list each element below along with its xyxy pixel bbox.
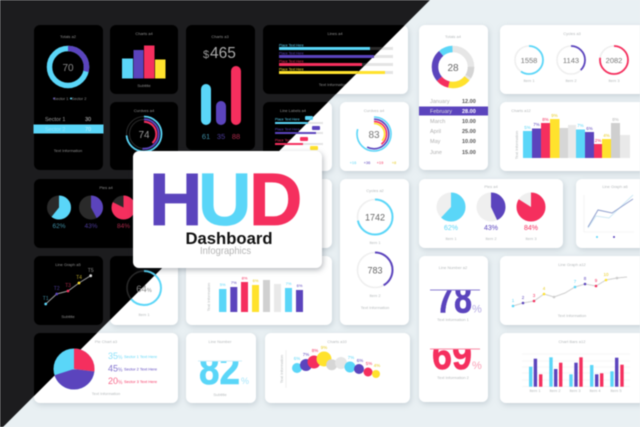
panel: pies dark: 43% [84,223,98,230]
panel: curves dark: 74 [138,130,150,141]
panel: line graph dark: T1 [43,296,49,302]
panel: bubble chart [265,333,410,403]
panel: bubble chart: 7% [348,355,354,360]
panel: pies dark: Pies a4 [99,185,113,190]
panel: curves light: Curdves a4 [364,108,385,113]
panel: lines light [263,25,408,94]
panel: totals donut and table: March [430,119,445,125]
panel: line labels dark: Line Labels a4 [280,108,307,113]
panel: charts a12 grouped bars: 6% [586,126,593,131]
panel: curves light: +16 [350,160,357,165]
panel: totals donut and table: May [430,139,441,145]
panel: cycles: Item 1 [523,78,535,83]
panel: lines dark: Text Information [319,82,347,87]
panel: chart bars a12: Item 5 [610,388,622,393]
panel: line graph dark [34,256,103,325]
dark background [0,0,430,427]
panel: line number 82: Subtitle [213,392,227,397]
panel: bubble chart: Text Information [279,355,284,383]
panel: line labels dark [262,102,328,152]
panel: totals donut and table: 15.00 [462,150,476,156]
panel: pie chart light: Sector 3 Text Here [124,379,158,384]
panel: line labels light [263,102,332,171]
panel: charts a12 grouped bars: 9% [551,113,558,118]
panel: cycles: 2082 [606,56,622,65]
panel: line graph a12: 4 [543,286,546,291]
panel: rounded bars dark: Charts a3 [211,34,229,39]
panel: line graph dark: T2 [54,286,60,292]
panel: cycles vertical [340,179,409,325]
panel: charts a12 grouped bars: 7% [577,123,584,128]
panel: line numbers 78 and 69: 78 [436,275,472,322]
panel: curves light: +19 [377,160,384,165]
dark dashboard layer [0,0,430,427]
panel: lines dark: Lines a4 [327,31,343,36]
panel: line number 82 [186,333,256,403]
panel: pie chart light [34,333,178,403]
panel: chart bars a12 [500,333,640,403]
panel: line number 82: % [241,376,249,386]
panel: line graph dark: Subtitle [61,314,75,319]
panel: charts a12 grouped bars: 7% [533,122,540,127]
panel: bubble chart: 6% [294,356,300,361]
panel: totals donut and table: 28 [447,63,459,74]
panel: line graph a12: 2 [522,295,525,300]
panel: line numbers 78 and 69: Text Information 1 [437,317,470,322]
panel: bubble chart: 5% [366,361,372,366]
panel: vertical bars: Text Information [206,283,211,311]
panel: line graph a12 [500,256,640,325]
panel: charts dark [110,25,178,94]
panel: lines dark: Place Text Here [279,68,304,72]
panel: line graph dark: T5 [88,268,94,274]
panel: line graph a12: 7 [574,279,577,284]
panel: totals dark: Totals a2 [60,34,77,39]
panel: lines dark: Place Text Here [279,44,304,48]
panel: pies light: 43% [484,225,498,232]
panel: totals donut and table: Totals a4 [445,34,462,39]
panel: totals dark: 70 [85,127,91,133]
panel: pies light: Item 2 [485,236,497,241]
panel: line numbers 78 and 69: % [472,304,482,316]
panel: rounded bars dark: $ [203,49,209,61]
hero letter D: D [249,158,302,241]
panel: line graph a6: Line Graph a6 [602,184,628,189]
panel: 64 percent ring light [110,256,178,325]
panel: bubble chart: 9% [321,345,327,350]
panel: pie chart light: Pie Chart a3 [95,339,118,344]
pie chart [54,348,94,390]
panel: chart bars a12: Item 4 [589,388,601,393]
panel: line graph dark: T3 [65,283,71,289]
panel: totals donut and table: 10.00 [462,139,476,145]
panel: pie card dark [34,332,97,396]
panel: pies light: Pies a4 [484,184,498,189]
panel: line labels dark: Place Text Here [275,128,300,132]
panel: pies dark [34,178,134,248]
panel: line numbers 78 and 69: Line Number a2 [439,265,468,270]
panel: 64 percent ring light: Item 1 [138,312,150,317]
panel: charts dark: Charts a4 [135,31,153,36]
panel: cycles [500,25,640,94]
panel: lines dark: Place Text Here [279,60,304,64]
panel: vertical bars [186,256,332,325]
panel: cycles vertical: Cycles a2 [366,188,385,193]
panel: pie chart light: Sector 2 Text Here [124,366,158,372]
panel: pies dark: 84% [117,223,130,230]
panel: totals dark: Text Information [54,148,82,153]
panel: charts a12 grouped bars: Text Information [514,131,519,159]
panel: line graph a12: 8 [584,276,587,281]
panel: charts a12 grouped bars: 8% [542,117,549,122]
panel: line graph a12: 3 [533,293,536,298]
panel: charts a12 grouped bars: 4% [603,133,610,138]
panel: vertical bars: 5% [220,282,226,287]
hero letter H: H [149,158,202,241]
panel: charts a12 grouped bars: 8% [612,117,619,122]
panel: totals donut and table [419,25,488,170]
panel: charts dark: Subtitle [137,83,151,88]
panel: charts a12 grouped bars: 5% [524,125,531,130]
panel: totals dark: 30 [85,117,91,123]
panel: line graph a12: Text Information [558,313,586,318]
panel: curves light: +8 [392,160,397,165]
panel: line labels dark: Place Text Here [275,118,300,122]
panel: totals donut and table: April [430,129,441,135]
panel: rounded bars dark: 88 [232,132,240,141]
panel: totals donut and table: June [430,150,442,156]
panel: cycles vertical: 1742 [365,212,385,222]
panel: curves light [340,102,409,171]
panel: totals dark [34,25,104,170]
panel: cycles: Item 3 [608,78,620,83]
panel: rounded bars dark: 61 [202,132,210,141]
label: 64 percent: 64% [136,284,152,295]
panel: pies dark: 62% [52,223,66,230]
panel: totals donut and table: 12.00 [462,99,476,105]
panel: curves light: 83 [368,130,380,141]
panel: rounded bars dark: 35 [217,132,225,141]
panel: totals dark: Sector 1 [54,96,69,101]
panel: cycles: Item 2 [565,78,577,83]
panel: totals dark: 70 [62,63,74,74]
panel: pies light [419,179,563,248]
panel: 64 percent ring dark [110,256,162,320]
panel: line graph a12: 1 [512,298,515,303]
panel: charts a12 grouped bars: 2% [595,138,601,143]
panel: rounded bars dark: 465 [210,45,236,62]
panel: cycles vertical: Text Information [361,305,389,310]
panel: pie chart light: Text Information [92,391,120,396]
panel: curves dark [110,102,178,170]
panel: cycles: 1558 [521,56,537,65]
panel: line numbers 78 and 69: % [472,360,482,372]
panel: line graph a12: 10 [603,272,609,277]
panel: line graph a12: 9 [595,278,598,283]
panel: vertical bars: 6% [253,278,259,283]
panel: cycles vertical: Item 2 [369,293,381,298]
panel: cycles vertical: 783 [367,266,383,276]
panel: pie chart light: 20% [108,376,123,386]
panel: pies light: 84% [524,225,538,232]
panel: cycles vertical: Item 1 [369,240,381,245]
panel: totals dark: Sector 2 [45,127,65,133]
panel: line numbers 78 and 69: 69 [432,331,472,378]
panel: rounded bars dark [186,25,255,150]
panel: lines light: Text Information [311,82,339,87]
panel: totals donut and table: 28.00 [462,109,476,115]
panel: line numbers 78 and 69: Text Information 2 [437,375,470,380]
panel: line number 82: Line Number [209,339,232,344]
panel: vertical bars: 8% [242,276,248,280]
panel: totals dark: Sector 1 [45,117,65,123]
panel: chart bars a12: Chart Bars a12 [559,339,586,344]
panel: line labels dark: Place Text Here [275,138,300,142]
panel: pies light: Item 1 [445,236,457,241]
panel: chart bars a12: Item 3 [569,388,581,393]
panel: line numbers 78 and 69 [419,256,488,402]
panel: behind hero card [186,179,332,248]
panel: line number 82: 82 [199,346,240,394]
panel: charts a12 grouped bars [500,102,640,171]
hero card [133,151,322,268]
panel: totals donut and table: 10.00 [462,119,476,125]
panel: cycles: 1143 [563,56,579,65]
panel: charts a12 grouped bars: Charts a12 [511,108,532,113]
panel: totals donut and table: February [430,109,452,115]
panel: bubble chart: 4% [374,363,380,368]
panel: bubble chart: 8% [312,348,318,353]
panel: chart bars a12: Item 1 [529,388,541,393]
panel: bubble chart: 6% [357,358,363,363]
panel: totals dark: Sector 2 [72,96,87,101]
panel: lines dark [263,25,408,94]
panel: pies light: 62% [444,225,458,232]
panel: pies light: Item 3 [525,236,537,241]
panel: line graph a6 [576,179,640,248]
hero subtitle: Dashboard [186,229,272,248]
panel: curves light: +36 [364,160,371,165]
panel: curves dark: Curdves a4 [134,108,155,113]
panel: bubble chart: Charts a10 [327,339,348,344]
panel: vertical bars: 6% [297,283,303,288]
panel: vertical bars: 7% [231,280,237,285]
panel: vertical bars: 7% [286,281,292,286]
panel: chart bars a12: Item 2 [549,388,561,393]
panel: totals donut and table: January [430,99,450,105]
hero caption: Infographics [200,245,251,257]
panel: pie chart light: 45% [108,364,123,374]
panel: lines dark: Place Text Here [279,52,304,56]
hero letter U: U [198,158,251,241]
panel: totals donut and table: 25.00 [462,129,476,135]
panel: line graph dark: T4 [76,275,82,281]
panel: line graph a12: Line Graph a12 [558,262,587,267]
panel: line graph dark: Line Graph a5 [55,262,81,267]
panel: pie chart light: 35% [108,351,123,361]
panel: bubble chart: 7% [303,352,309,357]
panel: cycles: Cycles a3 [563,31,582,36]
panel: pie chart light: Sector 1 Text Here [124,354,158,359]
